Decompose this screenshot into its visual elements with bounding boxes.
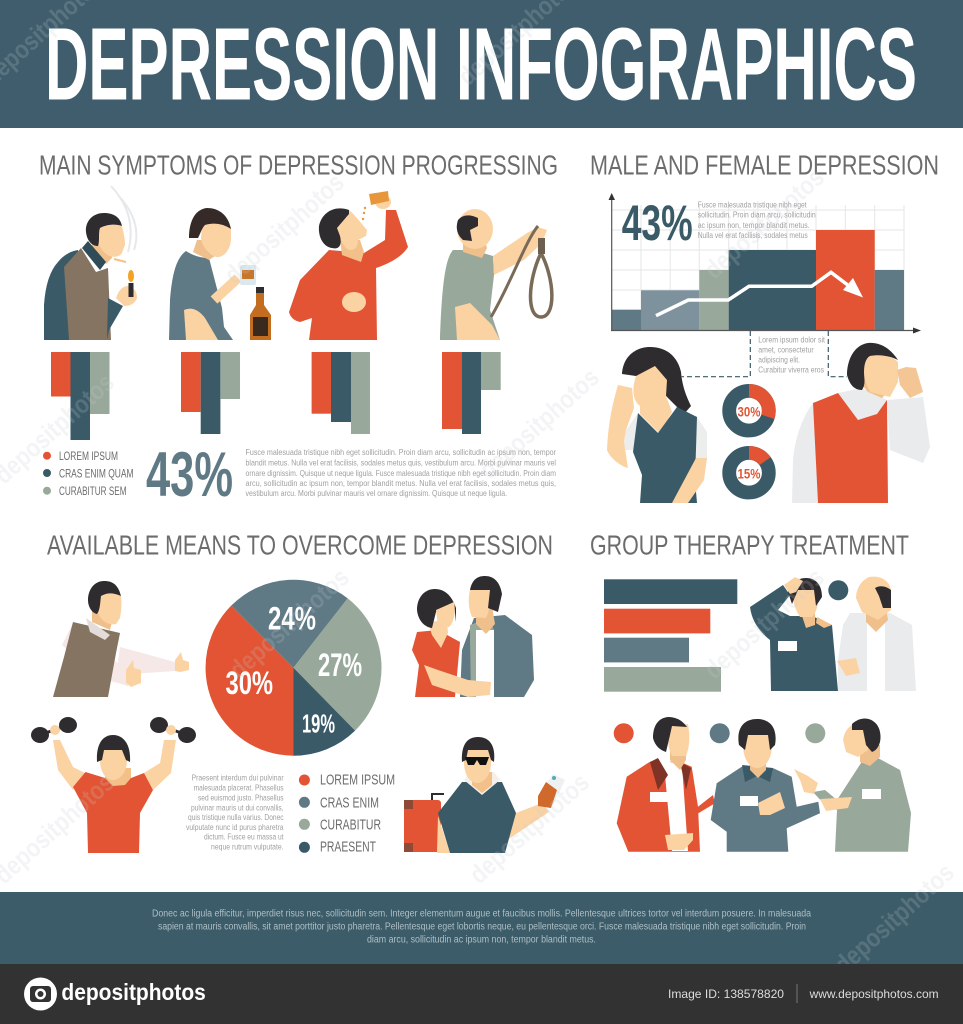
figure: man smoking bbox=[44, 186, 137, 340]
dots bbox=[614, 723, 825, 743]
footer text: sapien at mauris convallis, sit amet porttitor justo pharetra. Pellentesque eget lobortis neque, eu pellentesque orci. Fusce malesuada tristique nibh eget sollicitudin. Proin bbox=[158, 922, 806, 932]
paragraph: arcu, sollicitudin ac ipsum non, tempor blandit metus. Nulla vel erat facilisis, sodales metus quis, bbox=[246, 478, 556, 488]
paragraph: blandit metus. Nulla vel erat facilisis, sodales metus quis, vestibulum arcu. Morbi pulvinar mauris vel bbox=[246, 458, 556, 468]
panel: male and female depression bbox=[590, 150, 939, 503]
watermarks: depositphotos bbox=[463, 767, 595, 890]
pie note: quis tristique nulla varius. Donec bbox=[188, 812, 284, 822]
pie note: neque rutrum vulputate. bbox=[211, 841, 284, 851]
header band bbox=[0, 0, 963, 128]
dashed connectors bbox=[682, 331, 847, 377]
paragraph: ornare dignissim. Quisque ut neque ligula. Fusce malesuada tristique nibh eget sollicitudin. Proin diam bbox=[246, 468, 556, 478]
pie legend: CRAS ENIM bbox=[320, 794, 379, 811]
logo text: depositphotos bbox=[61, 979, 206, 1005]
pie chart: 19% bbox=[302, 709, 335, 739]
chart note bbox=[698, 200, 816, 240]
footer text: Donec ac ligula efficitur, imperdiet risus nec, sollicitudin sem. Integer elementum augue et faucibus mollis. Pellentesque ultrices tortor vel interdum posuere. In malesuada bbox=[152, 909, 812, 920]
pie legend bbox=[299, 772, 395, 856]
chart note: Nulla vel erat facilisis, sodales metus bbox=[698, 230, 808, 240]
watermarks: depositphotos bbox=[223, 562, 355, 685]
website: www.depositphotos.com bbox=[809, 987, 939, 1001]
donut 30 percent bbox=[729, 391, 769, 431]
pie legend: CURABITUR bbox=[320, 816, 381, 833]
connector note: Lorem ipsum dolor sit bbox=[758, 334, 825, 344]
heading: available means: AVAILABLE MEANS TO OVERCOME DEPRESSION bbox=[47, 530, 553, 561]
chart axes bbox=[608, 193, 921, 334]
donut 15 percent: 15% bbox=[738, 466, 761, 482]
figure: man pointing bbox=[794, 719, 911, 852]
source bar bbox=[0, 964, 963, 1024]
figure: man drinking from bottle bbox=[289, 191, 408, 340]
figure: man with hand on chest bbox=[711, 719, 820, 852]
chart note: sollicitudin. Proin diam arcu, sollicitudin bbox=[698, 210, 816, 220]
pie chart: 30% bbox=[226, 665, 273, 701]
image id: Image ID: 138578820 bbox=[668, 987, 784, 1001]
donut 30 percent: 30% bbox=[738, 404, 761, 420]
pie note: pulvinar mauris ut dui convallis, bbox=[191, 802, 284, 812]
legend bbox=[43, 451, 134, 498]
connector note: adipiscing elit. bbox=[758, 355, 800, 365]
watermarks: depositphotos bbox=[698, 162, 830, 285]
figure: man with dumbbells bbox=[31, 717, 196, 853]
trend arrow bbox=[656, 272, 863, 316]
watermarks: depositphotos bbox=[698, 562, 830, 685]
figure: man in red jacket bbox=[617, 717, 715, 852]
figure: woman with headache bbox=[607, 347, 707, 503]
connector note: Curabitur viverra eros bbox=[758, 364, 824, 374]
pie note: vulputate nunc id purus pharetra bbox=[186, 822, 284, 832]
pie note: Praesent interdum dui pulvinar bbox=[192, 773, 284, 783]
pie legend: LOREM IPSUM bbox=[320, 772, 395, 788]
pie note: sed euismod justo. Phasellus bbox=[198, 793, 284, 803]
legend: LOREM IPSUM bbox=[59, 451, 118, 463]
footer text bbox=[152, 909, 812, 946]
icon: camera logo bbox=[24, 978, 57, 1010]
pie chart bbox=[206, 580, 382, 756]
paragraph: vestibulum arcu. Morbi pulvinar mauris vel ornare dignissim. Quisque ut neque ligula. bbox=[246, 488, 507, 498]
heading: main symptoms: MAIN SYMPTOMS OF DEPRESSION PROGRESSING bbox=[39, 150, 558, 180]
figure: patient bbox=[750, 577, 838, 691]
panel: group therapy bbox=[590, 530, 916, 852]
donut 15 percent bbox=[729, 453, 769, 493]
pie note: dictum. Fusce eu massa ut bbox=[204, 831, 284, 841]
panel: available means bbox=[31, 530, 565, 856]
footer text: diam arcu, sollicitudin ac ipsum non, tempor blandit metus. bbox=[367, 935, 596, 946]
pie note bbox=[186, 773, 284, 851]
statistic 43 percent: 43% bbox=[146, 440, 233, 510]
chart note: Fusce malesuada tristique nibh eget bbox=[698, 200, 807, 210]
horizontal bar chart bbox=[604, 579, 737, 692]
dot bbox=[828, 580, 848, 600]
watermarks: depositphotos bbox=[218, 167, 350, 290]
paragraph bbox=[246, 447, 556, 498]
pie chart: 24% bbox=[268, 600, 316, 636]
statistic 43 percent chart: 43% bbox=[622, 195, 693, 251]
figure: man thumbs up bbox=[53, 581, 189, 697]
connector note bbox=[758, 334, 825, 374]
stacked bars: four progress groups bbox=[51, 352, 501, 440]
legend: CURABITUR SEM bbox=[59, 486, 126, 498]
figure: man drinking whisky bbox=[169, 208, 271, 340]
footer band bbox=[0, 892, 963, 964]
figure: man with headache bbox=[792, 343, 930, 503]
chart note: ac ipsum non, tempor blandit metus. bbox=[698, 220, 810, 230]
pie note: malesuada placerat. Phasellus bbox=[194, 783, 284, 793]
figure: doctor bbox=[837, 577, 916, 691]
connector note: amet, consectetur bbox=[758, 344, 814, 354]
watermarks: depositphotos bbox=[473, 362, 605, 485]
figure: man holding noose bbox=[440, 209, 552, 340]
pie chart: 27% bbox=[318, 647, 362, 683]
paragraph: Fusce malesuada tristique nibh eget sollicitudin. Proin diam arcu, sollicitudin ac ipsum non, tempor bbox=[246, 447, 556, 457]
bar chart bbox=[612, 230, 904, 330]
legend: CRAS ENIM QUAM bbox=[59, 468, 134, 480]
pie legend: PRAESENT bbox=[320, 839, 376, 856]
figure: couple shaking hands bbox=[412, 576, 534, 697]
panel: main symptoms bbox=[39, 150, 558, 510]
figure: traveller with suitcase bbox=[404, 737, 565, 853]
